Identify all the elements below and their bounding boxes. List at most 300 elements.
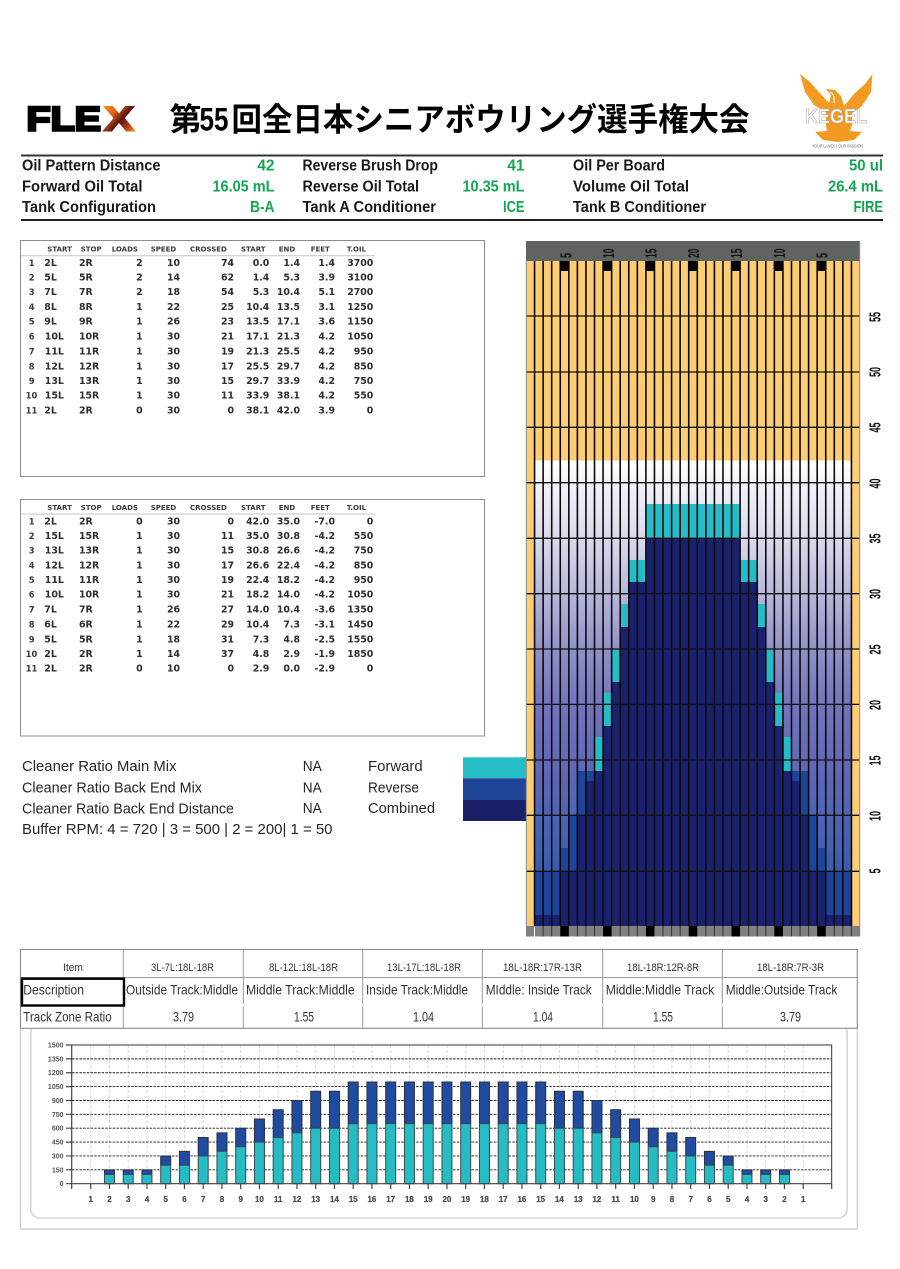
description row: Middle:Middle Track [606, 981, 715, 997]
row 5: 9L [44, 317, 57, 328]
row 9: 33.9 [277, 376, 300, 387]
row 8: 8 [29, 361, 35, 371]
table header: FEET [311, 246, 330, 254]
row 4: 3.1 [318, 302, 335, 313]
row 2: 3100 [347, 273, 374, 284]
x axis labels: 16 [517, 1195, 527, 1204]
row 7: 7 [29, 346, 35, 356]
row 11 [26, 664, 374, 675]
table header row: 18L-18R:7R-3R [757, 962, 824, 974]
description row: Inside Track:Middle [366, 981, 468, 997]
row 5: 11R [79, 575, 100, 586]
row 9: 30 [167, 376, 180, 387]
y axis labels [48, 1042, 64, 1188]
row 6: 17.1 [246, 331, 269, 342]
row 2 [29, 531, 374, 542]
x axis labels: 17 [386, 1195, 396, 1204]
table header: START [241, 504, 266, 512]
y axis labels: 750 [52, 1112, 64, 1119]
cleaner ratio text block [22, 758, 332, 838]
row 8: 29.7 [277, 361, 300, 372]
row 5: 30 [167, 575, 180, 586]
row 7: 27 [221, 605, 234, 616]
row 5: 18.2 [277, 575, 300, 586]
row 6: 1 [136, 590, 143, 601]
board numbers: 15 [729, 248, 746, 258]
row 8: 4.2 [318, 361, 335, 372]
board numbers: 20 [686, 248, 703, 258]
row 11: 0 [367, 405, 374, 416]
row 7: 4.2 [318, 346, 335, 357]
x axis labels: 5 [163, 1195, 168, 1204]
row 8: 850 [354, 361, 374, 372]
row 1: 1.4 [283, 258, 300, 269]
x axis labels: 16 [367, 1195, 377, 1204]
row 7: 25.5 [277, 346, 300, 357]
row 6: 1050 [347, 590, 374, 601]
row 4: 30 [167, 560, 180, 571]
row 2: -4.2 [314, 531, 335, 542]
row 10: 30 [167, 391, 180, 402]
row 7: 11R [79, 346, 100, 357]
row 2: 1 [136, 531, 143, 542]
row 6 [29, 590, 374, 601]
table header [47, 504, 367, 512]
row 3: 2 [136, 287, 143, 298]
row 7: 1 [136, 605, 143, 616]
pattern summary table: B-A [250, 199, 274, 216]
ratio row [23, 1008, 801, 1024]
x axis labels: 19 [461, 1195, 471, 1204]
row 8: 25.5 [246, 361, 269, 372]
row 2: 5L [44, 273, 57, 284]
x axis labels: 1 [801, 1195, 806, 1204]
row 11: -2.9 [314, 664, 335, 675]
row 5: 5 [29, 317, 35, 327]
row 9: 9 [29, 376, 35, 386]
description row: Middle Track:Middle [246, 981, 355, 997]
x axis labels: 2 [107, 1195, 112, 1204]
ratio row: Track Zone Ratio [23, 1008, 112, 1024]
row 5: -4.2 [314, 575, 335, 586]
table header: END [279, 504, 295, 512]
row 8: 1 [136, 361, 143, 372]
x axis labels: 12 [592, 1195, 602, 1204]
row 7: 11L [45, 346, 64, 357]
ratio row: 3.79 [780, 1008, 801, 1024]
y axis labels: 450 [52, 1140, 64, 1147]
row 7: 30 [167, 346, 180, 357]
table header row: 3L-7L:18L-18R [151, 962, 214, 974]
row 8: 1 [136, 620, 143, 631]
row 9: 13R [79, 376, 100, 387]
distance numbers: 5 [868, 868, 884, 874]
x axis labels: 14 [555, 1195, 564, 1204]
row 11: 0 [227, 405, 234, 416]
row 3: 15 [221, 546, 234, 557]
pattern summary table: 16.05 mL [212, 178, 274, 196]
pattern summary table: Volume Oil Total [573, 178, 689, 196]
board numbers: 10 [772, 248, 789, 258]
row 10: 4.2 [318, 391, 335, 402]
row 3: 13L [45, 546, 64, 557]
row 3: 5.3 [253, 287, 269, 298]
table header: LOADS [112, 246, 138, 254]
y axis labels: 300 [52, 1154, 64, 1160]
row 2: 15L [45, 531, 64, 542]
x axis labels: 18 [480, 1195, 489, 1204]
row 10: 15R [79, 391, 100, 402]
reverse bars [104, 1082, 789, 1174]
row 5: 11L [45, 575, 64, 586]
row 7: 26 [167, 605, 180, 616]
pattern summary table: 50 ul [849, 158, 883, 174]
cleaner ratio text block: NA [303, 758, 322, 775]
row 4: 17 [221, 560, 234, 571]
row 4: 26.6 [246, 560, 270, 571]
x axis labels: 13 [311, 1195, 321, 1204]
lane arrows top [560, 261, 826, 271]
description row: Middle:Outside Track [726, 981, 838, 997]
x axis labels: 20 [442, 1195, 452, 1204]
row 6: 1050 [347, 331, 374, 342]
row 4: -4.2 [314, 560, 335, 571]
table header: FEET [311, 504, 330, 512]
lane oil pattern chart [526, 241, 884, 936]
cleaner ratio text block: Cleaner Ratio Back End Mix [22, 780, 202, 796]
row 6: 14.0 [277, 590, 300, 601]
row 10: 4.8 [253, 649, 269, 660]
row 3: 5.1 [318, 287, 335, 298]
distance numbers: 50 [868, 367, 884, 377]
x axis labels: 6 [182, 1195, 187, 1204]
row 1: 2R [79, 516, 94, 527]
row 10: 1850 [347, 649, 374, 660]
table header: SPEED [151, 246, 176, 254]
logo: FLEX: X [104, 100, 134, 138]
row 1: 1 [29, 258, 35, 268]
table header [47, 246, 367, 254]
row 11: 2R [79, 664, 94, 675]
row 11: 30 [167, 405, 180, 416]
table header row: 8L-12L:18L-18R [269, 962, 338, 974]
row 3: 3 [29, 546, 35, 556]
ratio row: 1.04 [533, 1008, 553, 1024]
row 7: 14.0 [246, 605, 270, 616]
row 7: 950 [354, 346, 374, 357]
legend [368, 757, 526, 821]
row 3: 13R [79, 546, 100, 557]
row 6: 21.3 [277, 331, 300, 342]
ratio row: 1.55 [653, 1008, 673, 1024]
row 7: -3.6 [314, 605, 335, 616]
reverse oil zone [535, 771, 851, 915]
description row [23, 981, 838, 997]
row 6: 6 [29, 331, 35, 341]
row 3: 3 [29, 287, 35, 297]
row 10: 10 [26, 391, 37, 401]
row 3: 10.4 [277, 287, 300, 298]
row 2: 35.0 [246, 531, 270, 542]
row 8: 7.3 [283, 620, 300, 631]
pattern summary table: 26.4 mL [828, 178, 883, 196]
pattern summary table: 10.35 mL [462, 178, 524, 196]
row 6: 10R [79, 590, 100, 601]
x axis labels: 3 [126, 1195, 131, 1204]
row 10: 2R [79, 649, 94, 660]
board numbers: 15 [644, 248, 660, 258]
row 2: 15R [79, 531, 100, 542]
x axis labels: 18 [405, 1195, 414, 1204]
row 9: 1 [136, 634, 143, 645]
row 4: 12L [45, 560, 64, 571]
row 4: 25 [221, 302, 234, 313]
row 9: 4.8 [283, 634, 300, 645]
x axis labels: 12 [292, 1195, 302, 1204]
row 10: 2L [44, 649, 57, 660]
x axis labels: 9 [651, 1195, 656, 1204]
distance numbers: 15 [868, 755, 884, 766]
row 10 [26, 391, 374, 402]
row 4: 22 [167, 302, 180, 313]
row 3: 1 [136, 546, 143, 557]
row 9: 5L [44, 634, 57, 645]
row 6: -4.2 [314, 590, 335, 601]
table header row: Item [63, 962, 83, 974]
row 4: 12R [79, 560, 100, 571]
distance numbers: 40 [868, 478, 884, 488]
table header: START [241, 246, 266, 254]
row 1: 2L [44, 258, 57, 269]
row 11: 11 [26, 664, 37, 674]
cleaner ratio text block: Cleaner Ratio Back End Distance [22, 800, 234, 818]
row 11: 2L [44, 664, 57, 675]
distance numbers: 35 [868, 533, 884, 544]
distance numbers: 20 [868, 700, 884, 710]
table header: STOP [81, 246, 102, 254]
lane header band [526, 241, 860, 261]
row 10: 1 [136, 649, 143, 660]
row 5: 17.1 [277, 317, 300, 328]
row 4: 1250 [347, 302, 374, 313]
row 5 [29, 575, 374, 586]
x axis labels: 2 [782, 1195, 787, 1204]
row 8: 29 [221, 620, 234, 631]
y axis labels: 150 [52, 1167, 64, 1174]
row 9 [29, 376, 374, 387]
y axis labels: 1200 [48, 1070, 64, 1077]
row 9: 15 [221, 376, 234, 387]
x axis labels: 13 [574, 1195, 583, 1204]
row 5: 13.5 [246, 317, 269, 328]
row 3: 7L [44, 287, 57, 298]
row 9: -2.5 [314, 634, 335, 645]
x axis labels: 11 [611, 1195, 620, 1204]
x axis labels: 17 [499, 1195, 508, 1204]
selected cell: Description [22, 979, 124, 1006]
description row: Description [23, 981, 84, 997]
chart axes [66, 1045, 832, 1189]
row 8: 22 [167, 620, 180, 631]
row 8: 6R [79, 620, 94, 631]
pattern summary table: Oil Per Board [573, 158, 665, 174]
row 2: 30.8 [277, 531, 300, 542]
y axis labels: 0 [60, 1181, 64, 1188]
x axis labels: 8 [670, 1195, 675, 1204]
row 9: 4.2 [318, 376, 335, 387]
ratio row: 3.79 [173, 1008, 194, 1024]
y axis labels: 600 [52, 1126, 64, 1133]
row 4: 4 [29, 560, 35, 570]
table header: SPEED [151, 504, 176, 512]
logo: KEGEL: YOUR LANES | OUR PASSION [812, 144, 863, 148]
row 1: 2L [44, 516, 57, 527]
x axis labels: 19 [424, 1195, 433, 1204]
pattern summary table: Oil Pattern Distance [22, 158, 161, 174]
legend: Combined [368, 800, 435, 817]
row 11: 42.0 [277, 405, 300, 416]
legend: Forward [368, 758, 423, 775]
row 7: 19 [221, 346, 234, 357]
distance numbers: 30 [868, 589, 884, 599]
x axis labels: 6 [707, 1195, 712, 1204]
row 8 [29, 620, 374, 631]
row 3 [29, 287, 374, 298]
row 11: 11 [26, 405, 37, 415]
row 4: 13.5 [277, 302, 300, 313]
row 3: 30 [167, 546, 180, 557]
row 11: 0.0 [283, 664, 300, 675]
logo: KEGEL: KEGEL [805, 106, 867, 128]
row 9: 9 [29, 634, 35, 644]
table header row [63, 962, 824, 974]
table header row: 18L-18R:12R-8R [627, 962, 699, 974]
row 4: 22.4 [277, 560, 300, 571]
x axis labels: 8 [220, 1195, 225, 1204]
row 11: 0 [367, 664, 374, 675]
row 6: 10L [45, 331, 64, 342]
x axis labels: 14 [330, 1195, 339, 1204]
row 1: 30 [167, 516, 180, 527]
panel: oil volume bar chart [20, 1024, 857, 1229]
title: 第 [170, 102, 202, 138]
logo: FLEX [26, 100, 134, 138]
x axis labels: 15 [349, 1195, 358, 1204]
cleaner ratio text block: Buffer RPM: 4 = 720 | 3 = 500 | 2 = 200| 1 = 50 [22, 821, 332, 838]
row 6: 10L [45, 590, 64, 601]
row 9: 750 [354, 376, 374, 387]
board numbers: 5 [814, 253, 832, 258]
row 1: 0 [136, 516, 143, 527]
x axis labels: 7 [201, 1195, 206, 1204]
x axis labels: 3 [763, 1195, 768, 1204]
row 7: 7L [44, 605, 57, 616]
row 9: 1 [136, 376, 143, 387]
ratio row: 1.55 [294, 1008, 314, 1024]
table header: START [47, 246, 72, 254]
table header: CROSSED [190, 246, 227, 254]
row 1: 1.4 [318, 258, 335, 269]
x axis labels: 7 [688, 1195, 693, 1204]
forward bars [104, 1124, 789, 1184]
panel: track zone ratio table [20, 950, 857, 1028]
row 9: 5R [79, 634, 94, 645]
cleaner ratio text block: Cleaner Ratio Main Mix [22, 758, 177, 775]
x axis labels: 10 [255, 1195, 264, 1204]
row 11: 2.9 [253, 664, 269, 675]
cleaner ratio text block: NA [303, 780, 322, 796]
row 6: 18.2 [246, 590, 269, 601]
pattern summary table: FIRE [854, 199, 883, 216]
forward oil zone [595, 504, 791, 771]
row 5: 23 [221, 317, 234, 328]
row 2: 550 [354, 531, 374, 542]
row 2 [29, 273, 374, 284]
row 3: 30.8 [246, 546, 269, 557]
row 2: 62 [221, 273, 234, 284]
pattern summary table [21, 156, 883, 220]
board numbers: 10 [601, 248, 618, 258]
row 9: 31 [221, 634, 234, 645]
row 1: 3700 [347, 258, 374, 269]
row 7 [29, 605, 374, 616]
row 2: 2 [29, 273, 35, 283]
row 5: 1150 [347, 317, 374, 328]
row 6: 1 [136, 331, 143, 342]
row 3 [29, 546, 374, 557]
ratio row: 1.04 [413, 1008, 434, 1024]
row 1: 42.0 [246, 516, 270, 527]
x axis labels: 10 [630, 1195, 639, 1204]
row 3: 18 [167, 287, 180, 298]
row 10: 10 [26, 649, 37, 659]
row 2: 5R [79, 273, 94, 284]
pattern summary table: Tank Configuration [22, 199, 156, 216]
row 2: 14 [167, 273, 180, 284]
description row: Outside Track:Middle [126, 981, 238, 997]
row 1: 0.0 [253, 258, 270, 269]
row 5: 1 [136, 317, 143, 328]
row 10: 550 [354, 391, 374, 402]
board numbers: 5 [559, 253, 576, 258]
row 11: 10 [167, 664, 180, 675]
table header: START [47, 504, 72, 512]
row 11: 2R [79, 405, 94, 416]
row 11: 0 [136, 405, 143, 416]
row 8: 10.4 [246, 620, 270, 631]
row 4: 4 [29, 302, 35, 312]
row 8: 8 [29, 620, 35, 630]
y axis labels: 1350 [48, 1056, 64, 1063]
row 3: 750 [354, 546, 374, 557]
row 4: 8R [79, 302, 94, 313]
distance numbers: 25 [868, 644, 884, 654]
row 10: 33.9 [246, 391, 269, 402]
logo: KEGEL [800, 74, 872, 148]
row 6: 6 [29, 590, 35, 600]
panel: forward load table [20, 240, 484, 476]
x axis labels: 11 [274, 1195, 283, 1204]
x axis labels: 4 [745, 1195, 750, 1204]
row 10: 14 [167, 649, 180, 660]
row 4 [29, 560, 374, 571]
row 1: -7.0 [314, 516, 335, 527]
lane surface [526, 261, 860, 926]
row 9: 18 [167, 634, 180, 645]
x axis labels: 1 [88, 1195, 93, 1204]
row 10: 11 [221, 391, 234, 402]
distance numbers [868, 312, 884, 874]
